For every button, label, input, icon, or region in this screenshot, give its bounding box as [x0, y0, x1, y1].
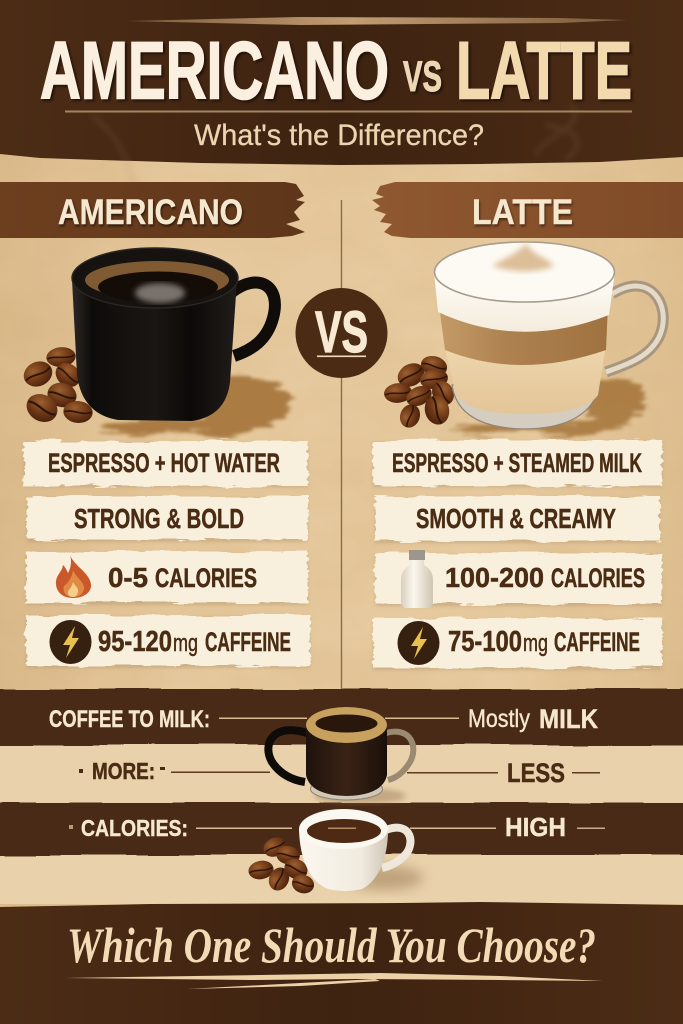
icon: lightning: [398, 621, 440, 665]
steam wisps: [92, 105, 578, 240]
vs badge: [296, 288, 388, 378]
tag: calories: [375, 550, 662, 608]
mug body: [72, 280, 237, 421]
row: coffee to milk: COFFEE TO MILK:: [49, 706, 210, 733]
mug base: [310, 778, 382, 800]
icon: milk bottle: [401, 550, 433, 608]
dark band: coffee to milk: [0, 689, 683, 745]
mug body: [306, 725, 387, 796]
panel: americano: [0, 182, 305, 434]
dark band: calories: [0, 803, 683, 855]
tag: caffeine: mg: [173, 630, 198, 657]
tag: caffeine: [373, 618, 662, 670]
row: coffee to milk: [49, 704, 598, 734]
icon: coffee beans: [383, 353, 458, 431]
tag: calories: CALORIES: [155, 563, 257, 593]
coffee surface: [316, 714, 378, 732]
cup rim: [299, 809, 388, 849]
tag: calories: [26, 552, 308, 605]
light band: [0, 744, 683, 904]
gold rim: [306, 707, 387, 743]
tag: strong and bold: [27, 496, 308, 542]
black mug: [72, 248, 275, 421]
title rule: [65, 110, 632, 112]
footer panel: [0, 902, 683, 1024]
icon: coffee beans: [247, 834, 316, 896]
icon: flame: [56, 555, 91, 598]
latte banner: LATTE: [472, 193, 573, 232]
row: calories: CALORIES:: [81, 815, 188, 841]
tag: caffeine: 75-100: [448, 626, 522, 658]
footer background: [0, 902, 683, 1024]
icon: lightning: [50, 620, 92, 664]
americano banner: [0, 182, 305, 238]
mug shadow: [314, 788, 406, 804]
tag: smooth and creamy: [375, 496, 660, 543]
row: more or less: [79, 758, 600, 788]
row: calories: HIGH: [505, 814, 566, 842]
tag: espresso + hot water: ESPRESSO + HOT WATER: [48, 448, 280, 478]
coffee surface: [98, 272, 218, 302]
row: more or less: LESS: [507, 758, 565, 788]
comparison panel: [0, 689, 683, 904]
tag: smooth and creamy: SMOOTH & CREAMY: [416, 503, 616, 534]
mug handle: [232, 283, 275, 356]
glass base: [452, 385, 600, 429]
white cup shadow: [347, 866, 423, 890]
cup body: [299, 830, 388, 891]
header background: [0, 0, 683, 165]
mug rim: [72, 248, 238, 308]
latte facts: [373, 440, 662, 670]
steam reflection: [135, 283, 185, 303]
coffee stain: [100, 376, 291, 434]
tag: caffeine: mg: [523, 630, 548, 657]
vs badge: VS: [315, 300, 368, 365]
header panel: [0, 0, 683, 240]
white cup: [299, 809, 410, 891]
row: calories: [69, 814, 605, 842]
hybrid mug: [268, 707, 413, 804]
cinnamon dusting: [492, 243, 554, 271]
latte banner: [372, 182, 683, 238]
footer brush underline: [65, 973, 603, 989]
coffee surface: [307, 819, 381, 843]
title: AMERICANO: [40, 26, 389, 116]
icon: coffee beans: [20, 346, 94, 428]
row: coffee to milk: Mostly: [468, 705, 530, 733]
latte glass: [434, 242, 663, 429]
tag: caffeine: CAFFEINE: [205, 627, 291, 657]
milk layer: [444, 345, 606, 414]
americano facts: [24, 441, 310, 668]
tag: caffeine: 95-120: [98, 626, 172, 658]
title: VS: [403, 53, 442, 101]
glass handle: [606, 286, 663, 372]
americano banner: AMERICANO: [58, 193, 243, 232]
tag: caffeine: CAFFEINE: [554, 627, 640, 657]
centre divider: [340, 200, 342, 690]
subtitle: What's the Difference?: [194, 119, 484, 152]
coffee stain: [455, 378, 645, 433]
foam: [434, 272, 615, 332]
left handle: [268, 730, 307, 782]
crema: [85, 261, 229, 299]
espresso layer: [439, 305, 608, 365]
tag: calories: 0-5: [108, 562, 148, 593]
header top stroke: [126, 17, 627, 25]
foam top: [434, 242, 614, 302]
tag: caffeine: [26, 615, 310, 668]
cup handle: [382, 828, 410, 868]
tag: espresso + hot water: [24, 441, 308, 487]
tag: espresso + steamed milk: [373, 440, 662, 487]
row: more or less: MORE:: [92, 758, 155, 784]
right handle: [386, 732, 413, 780]
tag: calories: 100-200: [445, 562, 544, 593]
row: coffee to milk: MILK: [539, 704, 598, 734]
panel: latte: [372, 182, 683, 433]
tag: strong and bold: STRONG & BOLD: [74, 503, 244, 534]
